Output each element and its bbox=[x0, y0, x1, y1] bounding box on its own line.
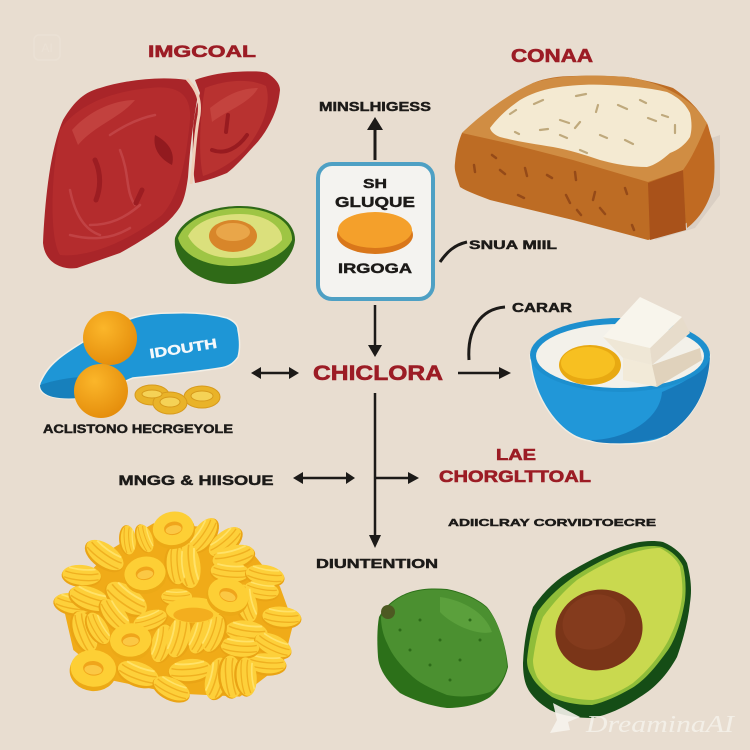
label: left caption: ACLISTONO HECRGEYOLE bbox=[43, 424, 233, 436]
icon: pasta pile bbox=[51, 508, 302, 708]
caption: bottom centre: DIUNTENTION bbox=[316, 557, 438, 571]
icon: bowl with tofu and egg bbox=[530, 297, 710, 444]
curved connector: carar bbox=[469, 307, 505, 360]
curved connector: small label bbox=[440, 242, 467, 262]
arrow: card to centre word bbox=[368, 305, 382, 357]
caption: right: ADIICLRAY CORVIDTOECRE bbox=[448, 518, 656, 529]
watermark bbox=[550, 703, 735, 738]
card title line two: GLUQUE bbox=[335, 194, 415, 211]
card subtitle: IRGOGA bbox=[338, 260, 412, 276]
icon: liver bbox=[43, 71, 280, 268]
badge: faint AI mark bbox=[34, 35, 60, 60]
centre word: CHICLORA bbox=[313, 362, 443, 385]
orange ball top bbox=[83, 311, 137, 365]
heading: top right: CONAA bbox=[511, 46, 593, 66]
icon: orange disc bbox=[337, 212, 413, 254]
heading: chorgltoal: CHORGLTTOAL bbox=[439, 467, 591, 486]
arrow: up from card bbox=[367, 117, 383, 160]
badge: faint AI mark: AI bbox=[41, 41, 53, 55]
panel: centre card bbox=[318, 164, 433, 299]
label: curved arrow text: CARAR bbox=[512, 300, 573, 315]
arrow: long vertical bbox=[369, 393, 381, 548]
pill label: IDOUTH bbox=[149, 336, 218, 361]
icon: blue pill with orange balls bbox=[40, 311, 239, 418]
card title: SH bbox=[363, 176, 387, 191]
label: mid left caption: MNGG & HIISOUE bbox=[118, 472, 274, 488]
watermark: DreaminaAI bbox=[585, 712, 735, 738]
arrow: branch right bbox=[375, 472, 419, 484]
label: curved connector text: SNUA MIIL bbox=[469, 238, 557, 252]
icon: avocado half bbox=[523, 541, 691, 718]
heading: lae: LAE bbox=[496, 447, 536, 464]
label: top arrow text: MINSLHIGESS bbox=[319, 100, 431, 114]
arrow: double mid bbox=[293, 472, 355, 484]
arrow: double left of centre bbox=[251, 367, 299, 379]
icon: lime bbox=[377, 588, 508, 708]
small rings bbox=[135, 385, 220, 414]
icon: bread bbox=[455, 76, 720, 240]
orange ball bottom bbox=[74, 364, 128, 418]
icon: small avocado bbox=[175, 206, 295, 284]
heading: top left: IMGCOAL bbox=[148, 42, 256, 61]
arrow: centre to bowl bbox=[458, 367, 511, 379]
